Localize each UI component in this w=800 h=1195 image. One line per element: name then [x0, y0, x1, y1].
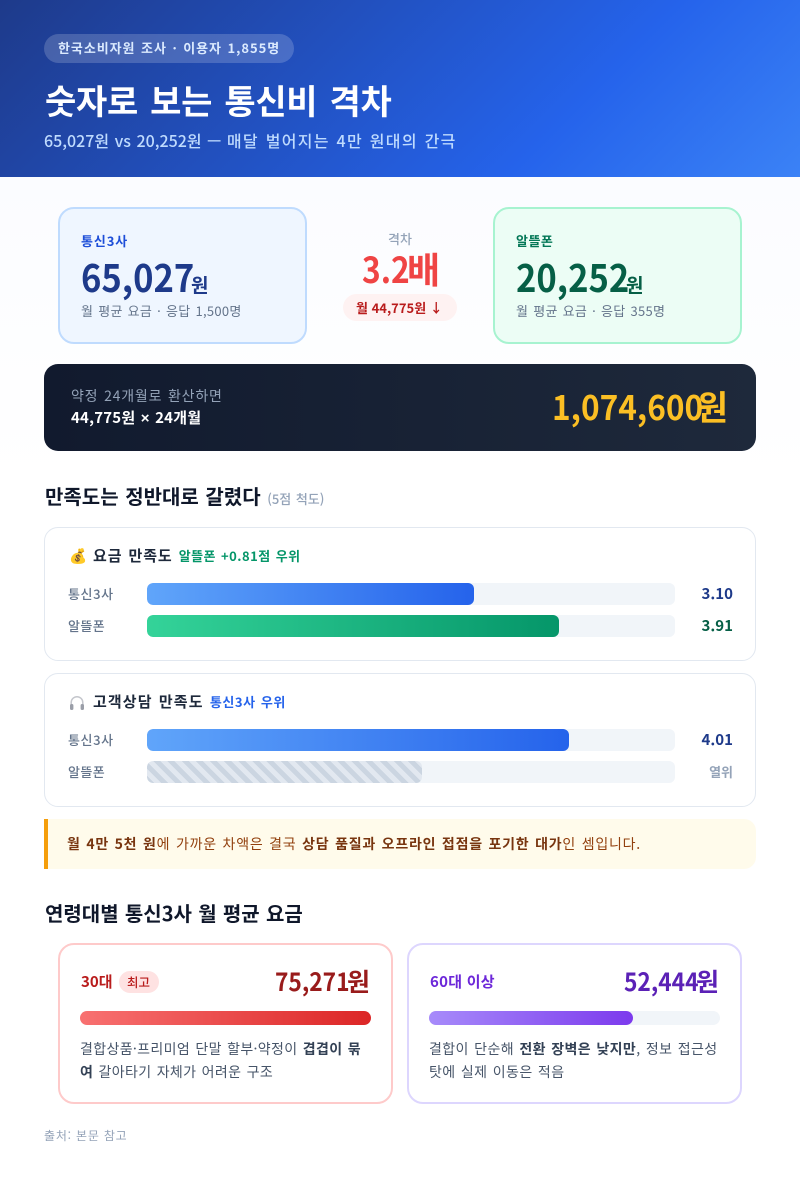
age description: 결합이 단순해 전환 장벽은 낮지만, 정보 접근성 [429, 1039, 718, 1059]
source note: 출처: 본문 참고 [44, 1127, 128, 1144]
age description [80, 1039, 361, 1082]
heading: satisfaction: 만족도는 정반대로 갈렸다 (5점 척도) [45, 481, 324, 510]
age price: 원 [696, 963, 719, 999]
subtitle: 65,027원 vs 20,252원 — 매달 벌어지는 4만 원대의 간극 [44, 128, 457, 152]
highest tag [119, 971, 159, 993]
carrier note: 월 평균 요금 · 응답 1,500명 [81, 301, 242, 320]
header banner [0, 0, 800, 177]
MVNO price: 20,252 [516, 248, 629, 303]
MVNO no-data label: 열위 [709, 762, 733, 781]
gap badge: 월 44,775원 ↓ [356, 298, 443, 317]
carrier label: 통신3사 [81, 231, 128, 250]
icon: headphones [70, 696, 84, 710]
total amount: 1,074,600 [552, 381, 703, 430]
carrier bar [147, 583, 675, 605]
gap multiple [362, 242, 440, 294]
panel: age 60s [407, 943, 742, 1104]
age label: 60대 이상 [430, 971, 495, 992]
MVNO bar [147, 615, 675, 637]
age description: 결합상품·프리미엄 단말 할부·약정이 겹겹이 묶 [80, 1039, 361, 1059]
total caption: 약정 24개월로 환산하면 [71, 386, 223, 406]
callout [44, 819, 756, 869]
MVNO row label: 알뜰폰 [68, 616, 105, 635]
gap label: 격차 [388, 229, 412, 248]
carrier price: 65,027 [81, 248, 194, 303]
age price: 52,444 [624, 963, 699, 999]
carrier row label: 통신3사 [68, 584, 114, 603]
age description: 탓에 실제 이동은 적음 [429, 1062, 564, 1082]
panel: carrier price card [58, 207, 307, 344]
panel: age 30s [58, 943, 393, 1104]
gap multiple: 3.2 [362, 242, 410, 294]
MVNO note: 월 평균 요금 · 응답 355명 [516, 301, 665, 320]
carrier price: 원 [191, 271, 208, 298]
panel: support satisfaction [44, 673, 756, 807]
survey badge [44, 34, 294, 63]
carrier score: 3.10 [702, 583, 733, 604]
gap multiple: 배 [407, 242, 440, 294]
price satisfaction title: 요금 만족도 알뜰폰 +0.81점 우위 [93, 545, 301, 566]
callout text: 월 4만 5천 원에 가까운 차액은 결국 상담 품질과 오프라인 접점을 포기한 대가인 셈입니다. [67, 834, 641, 854]
age bar fill [429, 1011, 633, 1025]
age bar track [429, 1011, 720, 1025]
survey badge: 한국소비자원 조사 · 이용자 1,855명 [58, 38, 280, 57]
age price: 75,271 [275, 963, 350, 999]
panel: gap center [343, 229, 457, 321]
age bar [80, 1011, 371, 1025]
panel: 24 month total [44, 364, 756, 451]
age description [429, 1039, 718, 1082]
carrier bar [147, 729, 675, 751]
carrier row label: 통신3사 [68, 730, 114, 749]
panel: MVNO price card [493, 207, 742, 344]
age description: 여 갈아타기 자체가 어려운 구조 [80, 1062, 273, 1082]
age label: 30대 [81, 971, 113, 992]
age price: 원 [347, 963, 370, 999]
total amount: 원 [697, 381, 728, 430]
MVNO row label: 알뜰폰 [68, 762, 105, 781]
panel: price satisfaction [44, 527, 756, 661]
heading: by age: 연령대별 통신3사 월 평균 요금 [45, 898, 303, 927]
MVNO score: 3.91 [702, 615, 733, 636]
MVNO price: 원 [626, 271, 643, 298]
support satisfaction title: 고객상담 만족도 통신3사 우위 [93, 691, 286, 712]
total formula: 44,775원 × 24개월 [71, 407, 201, 428]
title: 숫자로 보는 통신비 격차 [45, 75, 391, 124]
gap badge [343, 294, 457, 321]
highest tag: 최고 [127, 972, 150, 991]
icon: money bag: 💰 [69, 545, 87, 566]
MVNO label: 알뜰폰 [516, 231, 553, 250]
carrier score: 4.01 [702, 729, 733, 750]
MVNO hatched bar [147, 761, 675, 783]
